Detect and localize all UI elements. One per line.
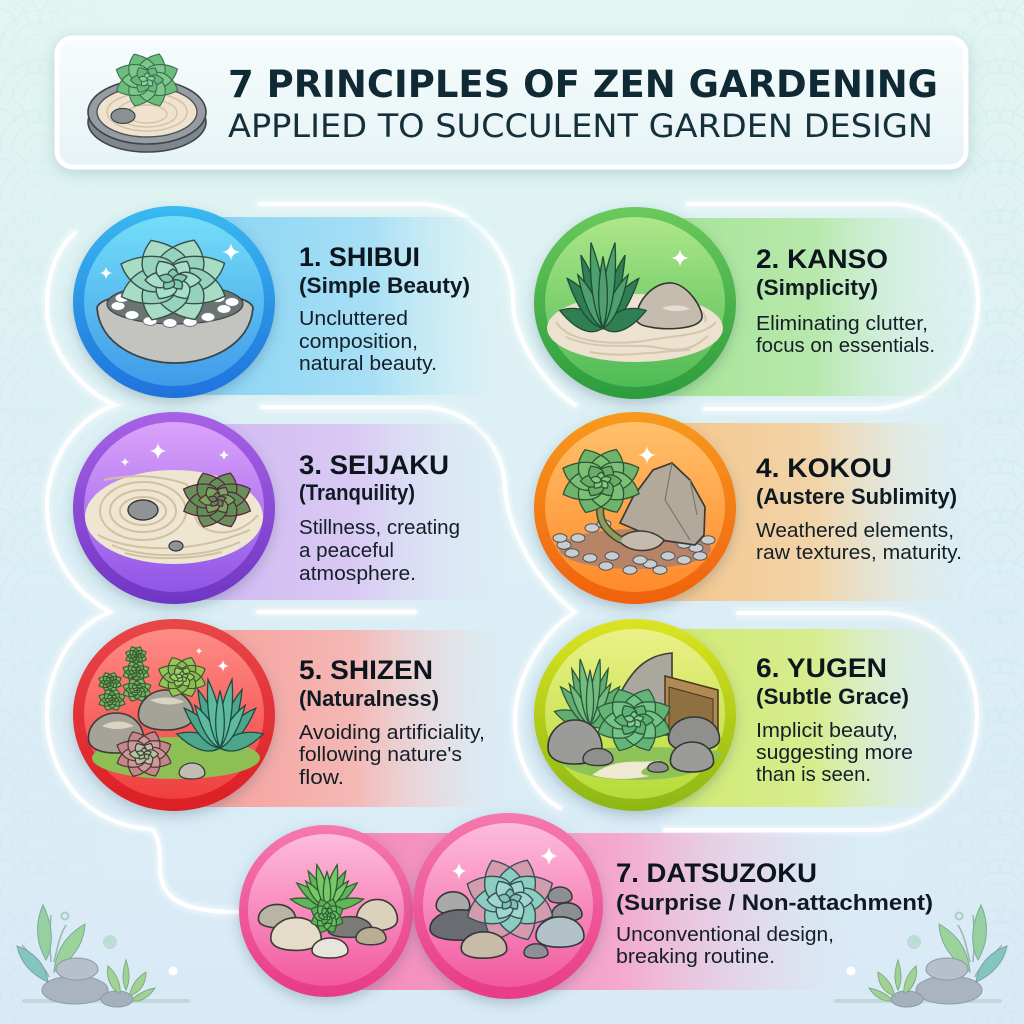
- description: [756, 313, 935, 357]
- description: [299, 517, 460, 585]
- description: focus on essentials.: [756, 335, 935, 357]
- badge: weathered rock and gravel: [534, 412, 736, 604]
- subheading: APPLIED TO SUCCULENT GARDEN DESIGN: [228, 107, 933, 145]
- heading: 7. DATSUZOKU: [616, 858, 817, 888]
- subheading: (Subtle Grace): [756, 684, 909, 709]
- heading: 7 PRINCIPLES OF ZEN GARDENING: [228, 63, 938, 106]
- description: Unconventional design,: [616, 924, 834, 946]
- heading: 4. KOKOU: [756, 453, 892, 483]
- description: Eliminating clutter,: [756, 313, 928, 335]
- badge: natural planting: [73, 619, 275, 811]
- band: [326, 833, 856, 990]
- description: than is seen.: [756, 764, 871, 786]
- panel: 2 Kanso: [534, 207, 965, 399]
- band: [174, 424, 504, 600]
- panel: 7 Datsuzoku: [239, 813, 933, 999]
- description: atmosphere.: [299, 563, 416, 585]
- description: following nature's: [299, 744, 462, 766]
- description: flow.: [299, 767, 344, 789]
- description: suggesting more: [756, 742, 913, 764]
- panel: 6 Yugen: [534, 619, 965, 811]
- description: a peaceful: [299, 540, 394, 562]
- heading: 1. SHIBUI: [299, 242, 420, 272]
- heading: 3. SEIJAKU: [299, 450, 449, 480]
- heading: 6. YUGEN: [756, 653, 887, 683]
- description: composition,: [299, 331, 418, 353]
- panel: 4 Kokou: [534, 412, 965, 604]
- subheading: (Simplicity): [756, 275, 878, 300]
- panel: 5 Shizen: [73, 619, 504, 811]
- icon: left corner stones and plants: [17, 905, 188, 1007]
- badge: bowl with succulent: [73, 206, 275, 398]
- panel: 1 Shibui: [73, 206, 504, 398]
- badge: raked sand with stones and rosette: [73, 412, 275, 604]
- icon: right corner stones and plants: [836, 905, 1007, 1007]
- subheading: (Simple Beauty): [299, 273, 470, 298]
- heading: 5. SHIZEN: [299, 655, 433, 685]
- description: [756, 720, 913, 786]
- band: [174, 217, 504, 395]
- description: Stillness, creating: [299, 517, 460, 539]
- description: natural beauty.: [299, 353, 437, 375]
- connector lines: [47, 204, 978, 912]
- description: [756, 520, 962, 564]
- band: [174, 630, 504, 807]
- description: [616, 924, 834, 968]
- description: Uncluttered: [299, 308, 408, 330]
- description: Implicit beauty,: [756, 720, 898, 742]
- subheading: (Tranquility): [299, 480, 415, 505]
- description: breaking routine.: [616, 946, 775, 968]
- band: [635, 629, 965, 807]
- subheading: (Austere Sublimity): [756, 484, 957, 509]
- badge: spiky succulent with pebbles: [239, 825, 413, 997]
- description: [299, 722, 485, 789]
- description: Avoiding artificiality,: [299, 722, 485, 744]
- description: raw textures, maturity.: [756, 542, 962, 564]
- panel: 3 Seijaku: [73, 412, 504, 604]
- title panel: [57, 38, 966, 167]
- icon: zen dish with succulent: [88, 50, 206, 152]
- band: [635, 218, 965, 396]
- description: Weathered elements,: [756, 520, 954, 542]
- heading: 2. KANSO: [756, 244, 888, 274]
- badge: aloe and rock on raked sand: [534, 207, 736, 399]
- badge: teal rosette with stones: [413, 813, 603, 999]
- badge: rocks, screen and rosette: [534, 619, 736, 811]
- subheading: (Naturalness): [299, 686, 439, 711]
- description: [299, 308, 437, 375]
- band: [635, 423, 965, 601]
- subheading: (Surprise / Non-attachment): [616, 890, 933, 915]
